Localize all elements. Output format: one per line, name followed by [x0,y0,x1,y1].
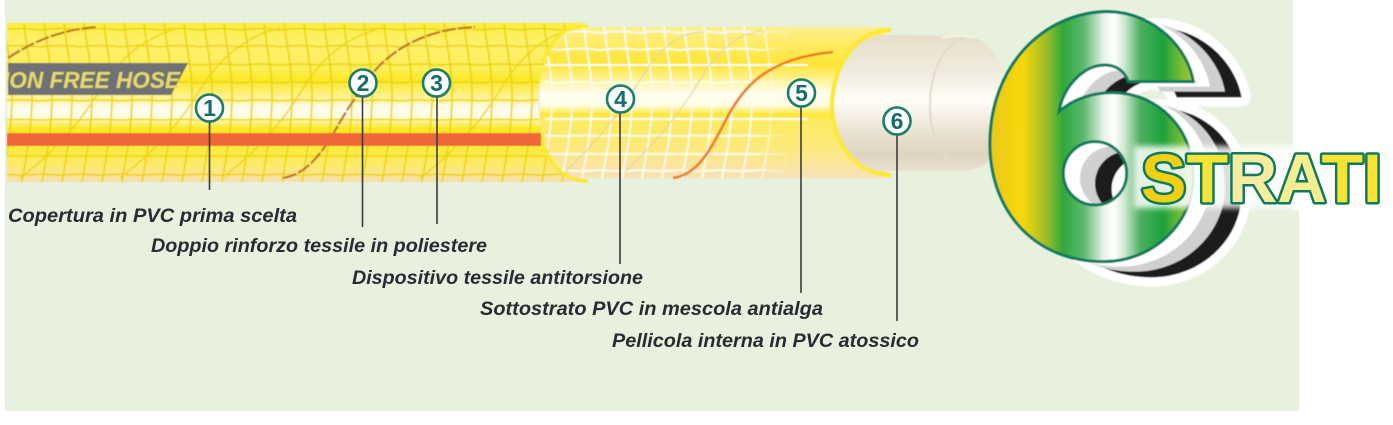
badge 5 [788,80,815,106]
leader lines [210,95,897,321]
layer 4: orange anti-torsion thread [673,52,833,178]
label 1: Copertura in PVC prima scelta [8,206,297,227]
logo: big 6 with layered shadows [990,12,1242,277]
badge 1 [196,94,223,122]
layer 5: under-layer section with white mesh [540,27,885,178]
layer 6: inner cream tube [832,30,1002,175]
hose illustration [3,23,1002,182]
logo: STRATI wordmark: STRATI [1141,140,1382,217]
badge 5: 5 [795,80,808,106]
green and yellow 6 [990,12,1193,262]
badge 2 [350,70,376,96]
badge 2: 2 [357,70,369,96]
grey brand plate: ION FREE HOSE [3,67,181,93]
badge 6 [884,108,910,134]
label 4: Sottostrato PVC in mescola antialga [480,299,823,320]
badge 3: 3 [430,70,443,96]
layer labels [8,206,919,352]
badge 3 [423,70,450,96]
badge 4: 4 [614,86,627,112]
shadow layers of the 6 [1007,17,1242,277]
badge 1: 1 [203,95,216,121]
label 5: Pellicola interna in PVC atossico [612,331,919,352]
badge 4 [607,86,634,112]
layer 1: outer PVC cover with mesh [7,23,597,182]
badge 6: 6 [891,108,903,134]
label 2: Doppio rinforzo tessile in poliestere [151,236,487,257]
number badges [196,70,910,134]
orange stripe [7,133,541,146]
label 3: Dispositivo tessile antitorsione [352,268,643,289]
